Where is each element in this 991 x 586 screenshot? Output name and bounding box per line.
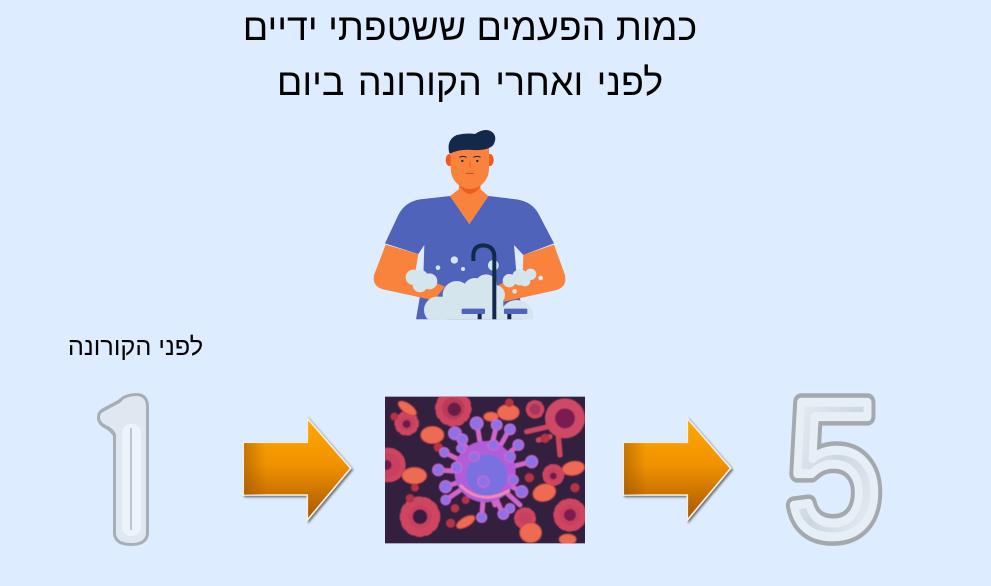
red virus particles: [374, 394, 585, 533]
ears: [446, 154, 451, 166]
label: before corona: לפני הקורונה: [68, 333, 203, 361]
red blood cells: [396, 398, 586, 545]
illustration: man washing hands: [374, 130, 565, 333]
foam: [406, 256, 543, 320]
left arm: [374, 245, 445, 300]
digit five: 5: [787, 360, 881, 576]
digit one: 1: [70, 354, 186, 586]
facial features: [459, 156, 481, 158]
arrow right: [623, 418, 731, 520]
right arm: [498, 245, 565, 302]
title: [243, 6, 697, 103]
faucet: [473, 245, 494, 319]
central purple virus: [438, 422, 532, 518]
arrow left: [243, 418, 351, 520]
virus image: [374, 394, 586, 545]
title: כמות הפעמים ששטפתי ידיים: [243, 6, 697, 48]
face: [451, 147, 489, 189]
hair: [449, 130, 495, 153]
shirt: [385, 196, 554, 319]
digit one: 1: [70, 354, 186, 586]
neck: [450, 183, 488, 224]
digit one: 1: [70, 354, 186, 586]
digit one: [97, 393, 149, 546]
title: לפני ואחרי הקורונה ביום: [277, 61, 663, 103]
digit five: 5: [787, 360, 881, 576]
